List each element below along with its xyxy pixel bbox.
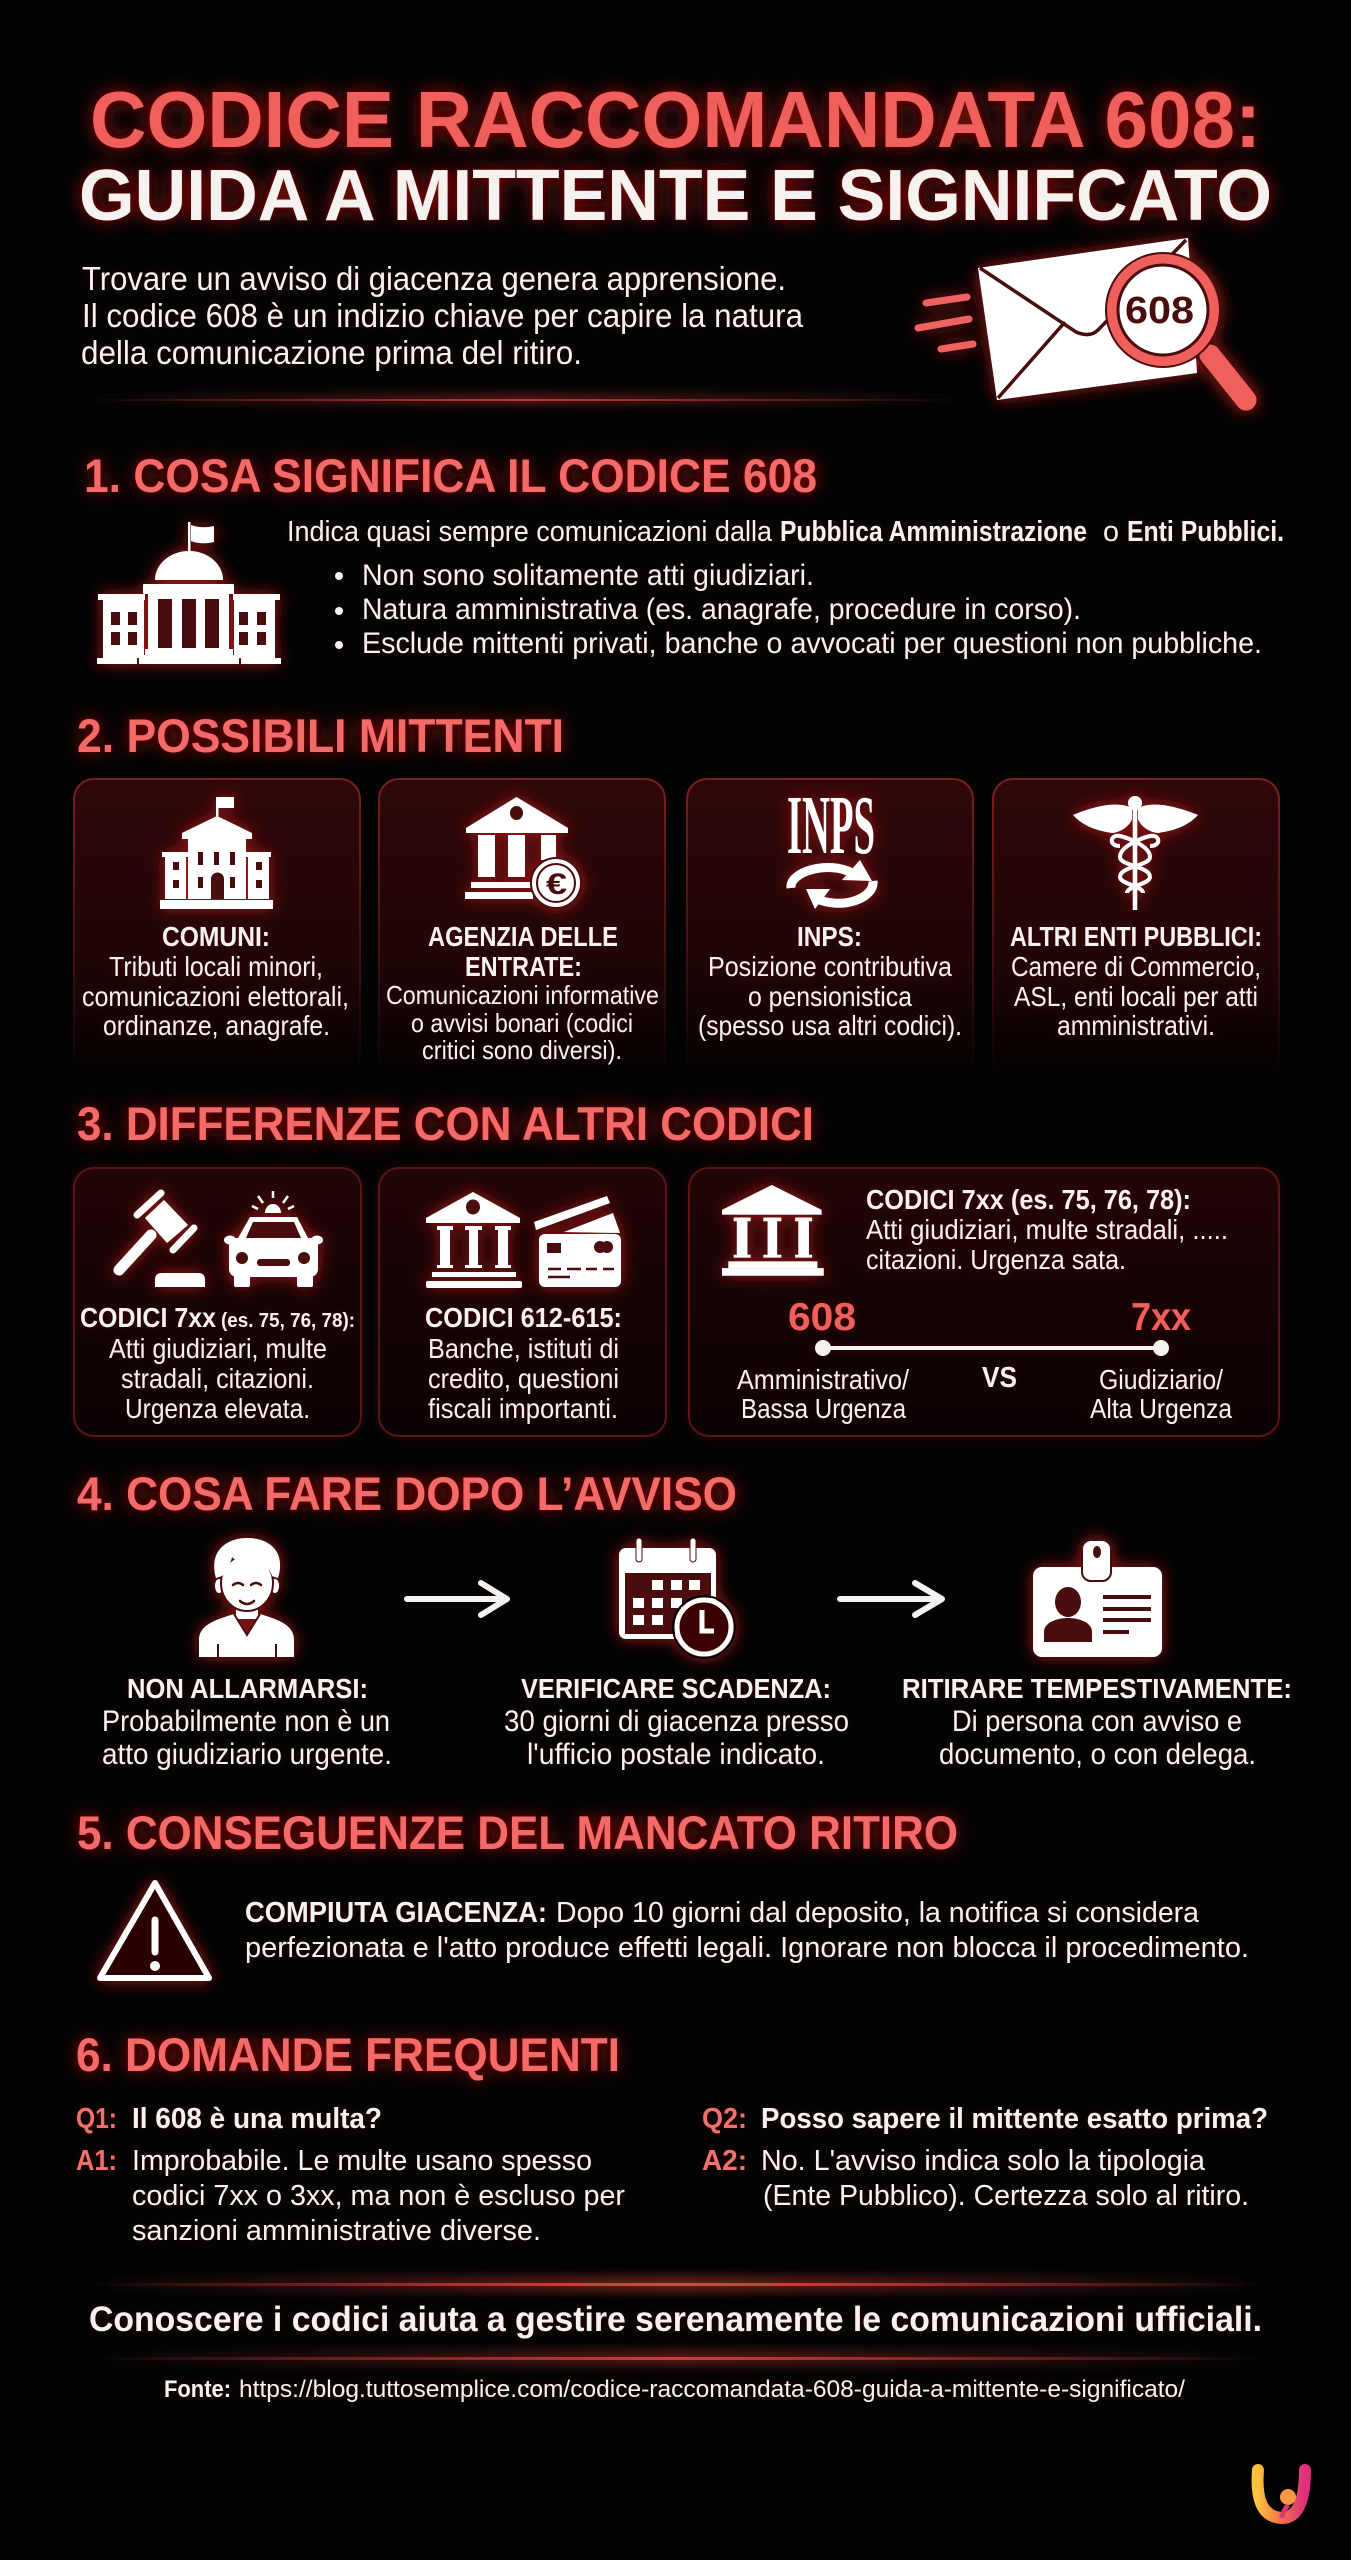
- heading: section 2: 2. POSSIBILI MITTENTI: [77, 709, 564, 762]
- card text: codici 7xx: stradali, citazioni.: [121, 1363, 314, 1394]
- card: comparison: [689, 1168, 1279, 1436]
- card text: codici 612-615: Banche, istituti di: [428, 1333, 619, 1364]
- card text: codici 7xx: CODICI 7xx: [80, 1302, 216, 1333]
- icon: envelope with magnifier: 608: [1125, 290, 1194, 332]
- card text: agenzia: [386, 921, 659, 1065]
- lead sentence: Enti Pubblici.: [1127, 516, 1284, 548]
- text: compiuta giacenza: COMPIUTA GIACENZA:: [245, 1897, 547, 1929]
- arrow: step 2 to 3: [840, 1583, 942, 1615]
- bullet list: Non sono solitamente atti giudiziari.: [362, 559, 814, 592]
- card text: inps: INPS:: [797, 921, 862, 952]
- comparison text: Atti giudiziari, multe stradali, .....: [866, 1214, 1228, 1245]
- comparison text: [866, 1184, 1228, 1275]
- card text: agenzia: critici sono diversi).: [422, 1035, 622, 1065]
- icon: person: [199, 1538, 294, 1657]
- title: GUIDA A MITTENTE E SIGNIFCATO: [79, 156, 1272, 236]
- card text: altri enti: amministrativi.: [1057, 1010, 1215, 1041]
- icon: gavel: [119, 1193, 205, 1287]
- intro text: Trovare un avviso di giacenza genera apprensione.: [82, 260, 786, 297]
- card text: codici 612-615: fiscali importanti.: [428, 1393, 618, 1424]
- icon: bank with euro coin: €: [546, 868, 567, 901]
- icon: police car: [224, 1191, 323, 1287]
- faq 1: Il 608 è una multa?: [132, 2103, 382, 2135]
- step text: ritirare tempestivamente: documento, o con delega.: [939, 1738, 1256, 1771]
- lead sentence: Indica quasi sempre comunicazioni dalla: [287, 516, 773, 548]
- icon: caduceus: [1073, 796, 1198, 910]
- panel: section 3: [74, 1097, 1279, 1436]
- faq 1: sanzioni amministrative diverse.: [132, 2215, 541, 2247]
- logo: [1258, 2470, 1305, 2518]
- card: inps: [687, 779, 973, 1077]
- card text: agenzia: ENTRATE:: [465, 951, 582, 982]
- lead sentence: o: [1103, 516, 1119, 548]
- card text: codici 7xx: (es. 75, 76, 78):: [221, 1310, 355, 1332]
- card: inps: INPS: [787, 779, 875, 872]
- card text: inps: o pensionistica: [748, 981, 912, 1012]
- card text: inps: Posizione contributiva: [708, 951, 952, 982]
- icon: calendar with clock: [619, 1538, 735, 1658]
- faq 2: (Ente Pubblico). Certezza solo al ritiro.: [763, 2180, 1249, 2212]
- icon: warning triangle: [100, 1883, 209, 1978]
- comparison scale: 608 vs 7xx: VS: [982, 1362, 1017, 1394]
- divider: closing bottom: [86, 2350, 1267, 2366]
- faq 2: No. L'avviso indica solo la tipologia: [761, 2145, 1206, 2177]
- title: CODICE RACCOMANDATA 608:: [90, 75, 1261, 164]
- text: compiuta giacenza: [245, 1897, 1249, 1964]
- arrow: step 1 to 2: [407, 1583, 507, 1615]
- card text: altri enti: ALTRI ENTI PUBBLICI:: [1010, 921, 1262, 952]
- panel: section 1: [84, 449, 1284, 664]
- heading: section 3: 3. DIFFERENZE CON ALTRI CODICI: [77, 1097, 814, 1150]
- intro text: [81, 260, 804, 371]
- comparison scale: 608 vs 7xx: 7xx: [1131, 1296, 1191, 1339]
- faq 1: Q1:: [76, 2103, 117, 2135]
- faq 1: Improbabile. Le multe usano spesso: [132, 2145, 592, 2177]
- title: [79, 75, 1272, 236]
- divider: closing top: [86, 2276, 1267, 2292]
- step text: ritirare tempestivamente: [902, 1673, 1292, 1771]
- comparison scale: 608 vs 7xx: Alta Urgenza: [1090, 1393, 1232, 1424]
- bullet list: Natura amministrativa (es. anagrafe, procedure in corso).: [362, 593, 1081, 626]
- card text: comuni: ordinanze, anagrafe.: [103, 1010, 330, 1041]
- lead sentence: Pubblica Amministrazione: [780, 516, 1087, 548]
- faq 1: codici 7xx o 3xx, ma non è escluso per: [132, 2180, 625, 2212]
- step text: non allarmarsi: Probabilmente non è un: [102, 1705, 390, 1738]
- panel: section 2: [74, 709, 1279, 1077]
- card text: comuni: Tributi locali minori,: [109, 951, 323, 982]
- icon: inps logo: [787, 779, 875, 909]
- icon: bank: [426, 1192, 522, 1288]
- step text: verificare scadenza: [504, 1673, 849, 1771]
- lead sentence: [287, 516, 1284, 548]
- panel: section 6: [76, 2028, 1268, 2247]
- source line: https://blog.tuttosemplice.com/codice-raccomandata-608-guida-a-mittente-e-significato/: [239, 2376, 1185, 2403]
- comparison text: CODICI 7xx (es. 75, 76, 78):: [866, 1184, 1191, 1215]
- faq 2: A2:: [702, 2145, 747, 2177]
- card text: codici 612-615: [425, 1302, 622, 1424]
- faq 2: [702, 2103, 1268, 2212]
- intro text: della comunicazione prima del ritiro.: [81, 334, 582, 371]
- card text: altri enti: [1010, 921, 1262, 1041]
- source line: Fonte:: [164, 2376, 231, 2403]
- comparison text: citazioni. Urgenza sata.: [866, 1244, 1126, 1275]
- step text: non allarmarsi: [102, 1673, 392, 1771]
- card text: codici 612-615: CODICI 612-615:: [425, 1302, 622, 1333]
- faq 1: [76, 2103, 625, 2247]
- panel: section 4: [77, 1467, 1292, 1771]
- comparison scale: 608 vs 7xx: Giudiziario/: [1099, 1364, 1223, 1395]
- step text: ritirare tempestivamente: Di persona con avviso e: [952, 1705, 1242, 1738]
- intro text: Il codice 608 è un indizio chiave per capire la natura: [82, 297, 804, 334]
- icon: credit card: [534, 1196, 621, 1287]
- card: agenzia delle entrate: [379, 779, 665, 1077]
- card text: agenzia: AGENZIA DELLE: [428, 921, 618, 952]
- card text: inps: [698, 921, 962, 1041]
- faq 1: A1:: [76, 2145, 117, 2177]
- card text: altri enti: Camere di Commercio,: [1011, 951, 1261, 982]
- closing statement: Conoscere i codici aiuta a gestire serenamente le comunicazioni ufficiali.: [89, 2300, 1262, 2339]
- comparison scale: 608 vs 7xx: Amministrativo/: [737, 1364, 909, 1395]
- text: compiuta giacenza: perfezionata e l'atto produce effetti legali. Ignorare non blocca il procedimento.: [245, 1932, 1249, 1964]
- icon: envelope with magnifier: [918, 238, 1246, 400]
- step text: verificare scadenza: l'ufficio postale indicato.: [527, 1738, 825, 1771]
- text: compiuta giacenza: Dopo 10 giorni dal deposito, la notifica si considera: [556, 1897, 1200, 1929]
- faq 2: Posso sapere il mittente esatto prima?: [761, 2103, 1268, 2135]
- panel: section 5: [77, 1806, 1249, 1978]
- card: comuni: [74, 779, 360, 1077]
- step text: non allarmarsi: NON ALLARMARSI:: [127, 1673, 368, 1704]
- card text: altri enti: ASL, enti locali per atti: [1014, 981, 1258, 1012]
- card: altri enti pubblici: [993, 779, 1279, 1077]
- card text: agenzia: o avvisi bonari (codici: [411, 1008, 633, 1038]
- faq 2: Q2:: [702, 2103, 747, 2135]
- card text: comuni: COMUNI:: [162, 921, 270, 952]
- card: codici 612-615: [379, 1168, 666, 1436]
- step text: non allarmarsi: atto giudiziario urgente.: [102, 1738, 392, 1771]
- card text: codici 7xx: Atti giudiziari, multe: [109, 1333, 327, 1364]
- card: codici 7xx: [74, 1168, 361, 1436]
- card text: comuni: comunicazioni elettorali,: [82, 981, 349, 1012]
- comparison scale: 608 vs 7xx: Bassa Urgenza: [741, 1393, 906, 1424]
- bullet list: [335, 559, 1262, 660]
- card text: agenzia: Comunicazioni informative: [386, 980, 659, 1010]
- card text: codici 612-615: credito, questioni: [428, 1363, 619, 1394]
- comparison scale: 608 vs 7xx: 608: [788, 1296, 856, 1339]
- heading: section 6: 6. DOMANDE FREQUENTI: [76, 2028, 620, 2081]
- card text: comuni: [82, 921, 349, 1041]
- heading: section 4: 4. COSA FARE DOPO L’AVVISO: [77, 1467, 737, 1520]
- card text: codici 7xx: [80, 1302, 355, 1424]
- step text: verificare scadenza: 30 giorni di giacenza presso: [504, 1705, 849, 1738]
- bullet list: Esclude mittenti privati, banche o avvocati per questioni non pubbliche.: [362, 627, 1262, 660]
- heading: section 5: 5. CONSEGUENZE DEL MANCATO RITIRO: [77, 1806, 958, 1859]
- card text: inps: (spesso usa altri codici).: [698, 1010, 962, 1041]
- icon: town hall: [160, 797, 273, 909]
- step text: ritirare tempestivamente: RITIRARE TEMPESTIVAMENTE:: [902, 1673, 1292, 1704]
- icon: bank with euro coin: [465, 797, 581, 908]
- heading: section 1: 1. COSA SIGNIFICA IL CODICE 608: [84, 449, 817, 502]
- icon: id badge: [1033, 1540, 1162, 1657]
- icon: courthouse: [722, 1185, 824, 1276]
- card text: codici 7xx: Urgenza elevata.: [125, 1393, 310, 1424]
- comparison scale: 608 vs 7xx: [737, 1296, 1232, 1424]
- step text: verificare scadenza: VERIFICARE SCADENZA:: [521, 1673, 831, 1704]
- icon: government building: [97, 522, 281, 664]
- divider: intro: [78, 394, 968, 404]
